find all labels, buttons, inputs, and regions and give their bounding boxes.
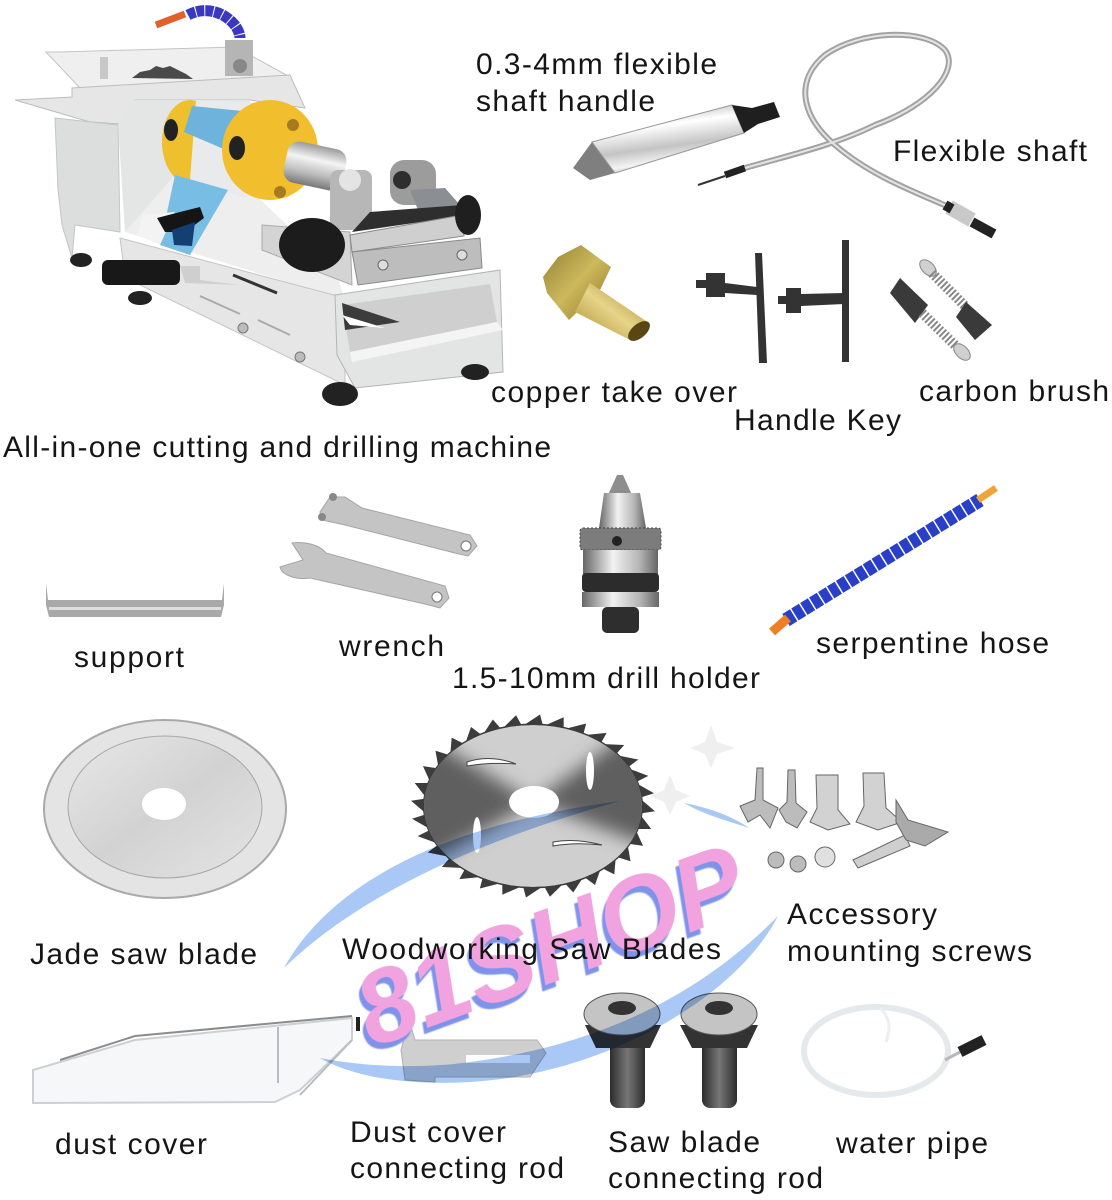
jade saw blade — [44, 720, 286, 898]
label: wrench: wrench — [338, 630, 444, 663]
wrenches — [280, 493, 477, 608]
serpentine hose — [772, 488, 996, 632]
saw blade connecting rods — [584, 993, 758, 1108]
carbon brushes — [890, 257, 992, 363]
label: support: support — [74, 641, 185, 674]
flexible shaft — [698, 35, 994, 234]
label: flexible shaft handle: 0.3-4mm flexible — [476, 48, 717, 81]
label: dust cover connecting rod: connecting rod — [350, 1152, 564, 1185]
saw disc — [424, 725, 642, 887]
machine saw guard and table — [15, 40, 305, 125]
label: machine: All-in-one cutting and drilling machine — [3, 431, 551, 464]
label: saw blade connecting rod: Saw blade — [608, 1126, 760, 1159]
label: handle key: Handle Key — [734, 404, 901, 437]
label: flexible shaft handle — [476, 48, 717, 118]
label: dust cover connecting rod — [350, 1116, 564, 1185]
label: carbon brush: carbon brush — [919, 375, 1109, 408]
label: mounting screws — [787, 898, 1032, 968]
saw slots — [467, 752, 602, 853]
machine vise — [262, 160, 482, 285]
machine motor — [162, 100, 318, 200]
dust cover connecting rod — [401, 1020, 546, 1082]
copper take over — [543, 245, 653, 345]
label: mounting screws: Accessory — [787, 898, 937, 931]
woodworking saw blade — [400, 710, 660, 898]
watermark wordmark: 81SHOP — [340, 822, 761, 1070]
decorative sparkles — [650, 725, 735, 815]
label: flexible shaft handle: shaft handle — [476, 85, 655, 118]
machine chuck — [281, 139, 372, 230]
machine: all-in-one cutting and drilling machine — [15, 11, 503, 406]
flexible shaft handle — [573, 102, 780, 180]
mounting screws — [740, 768, 948, 872]
machine base — [120, 238, 345, 385]
dust cover — [33, 1016, 360, 1103]
machine body — [55, 118, 120, 258]
watermark swooshes — [284, 801, 778, 1083]
label: water pipe: water pipe — [835, 1127, 988, 1160]
label: dust cover connecting rod: Dust cover — [350, 1116, 506, 1149]
label: woodworking saw blades: Woodworking Saw Blades — [342, 933, 721, 966]
support — [46, 583, 224, 617]
water pipe — [804, 1007, 984, 1095]
watermark: 81SHOP — [284, 801, 778, 1083]
machine control panel and knob — [138, 175, 228, 255]
handle keys — [696, 240, 849, 363]
label: saw blade connecting rod: connecting rod — [608, 1162, 823, 1195]
machine feet — [70, 253, 489, 406]
label: jade saw blade: Jade saw blade — [30, 938, 257, 971]
machine lever handle — [102, 260, 240, 285]
saw teeth — [411, 714, 655, 898]
label: dust cover: dust cover — [55, 1128, 207, 1161]
label: saw blade connecting rod — [608, 1126, 823, 1195]
label: mounting screws: mounting screws — [787, 935, 1032, 968]
label: copper take over: copper take over — [491, 376, 737, 409]
label: flexible shaft: Flexible shaft — [893, 135, 1088, 168]
machine serpentine nozzle — [156, 11, 240, 38]
label: drill holder: 1.5-10mm drill holder — [452, 662, 760, 695]
machine outlet slot — [342, 284, 497, 352]
drill holder — [580, 475, 661, 633]
label: serpentine hose: serpentine hose — [816, 627, 1049, 660]
